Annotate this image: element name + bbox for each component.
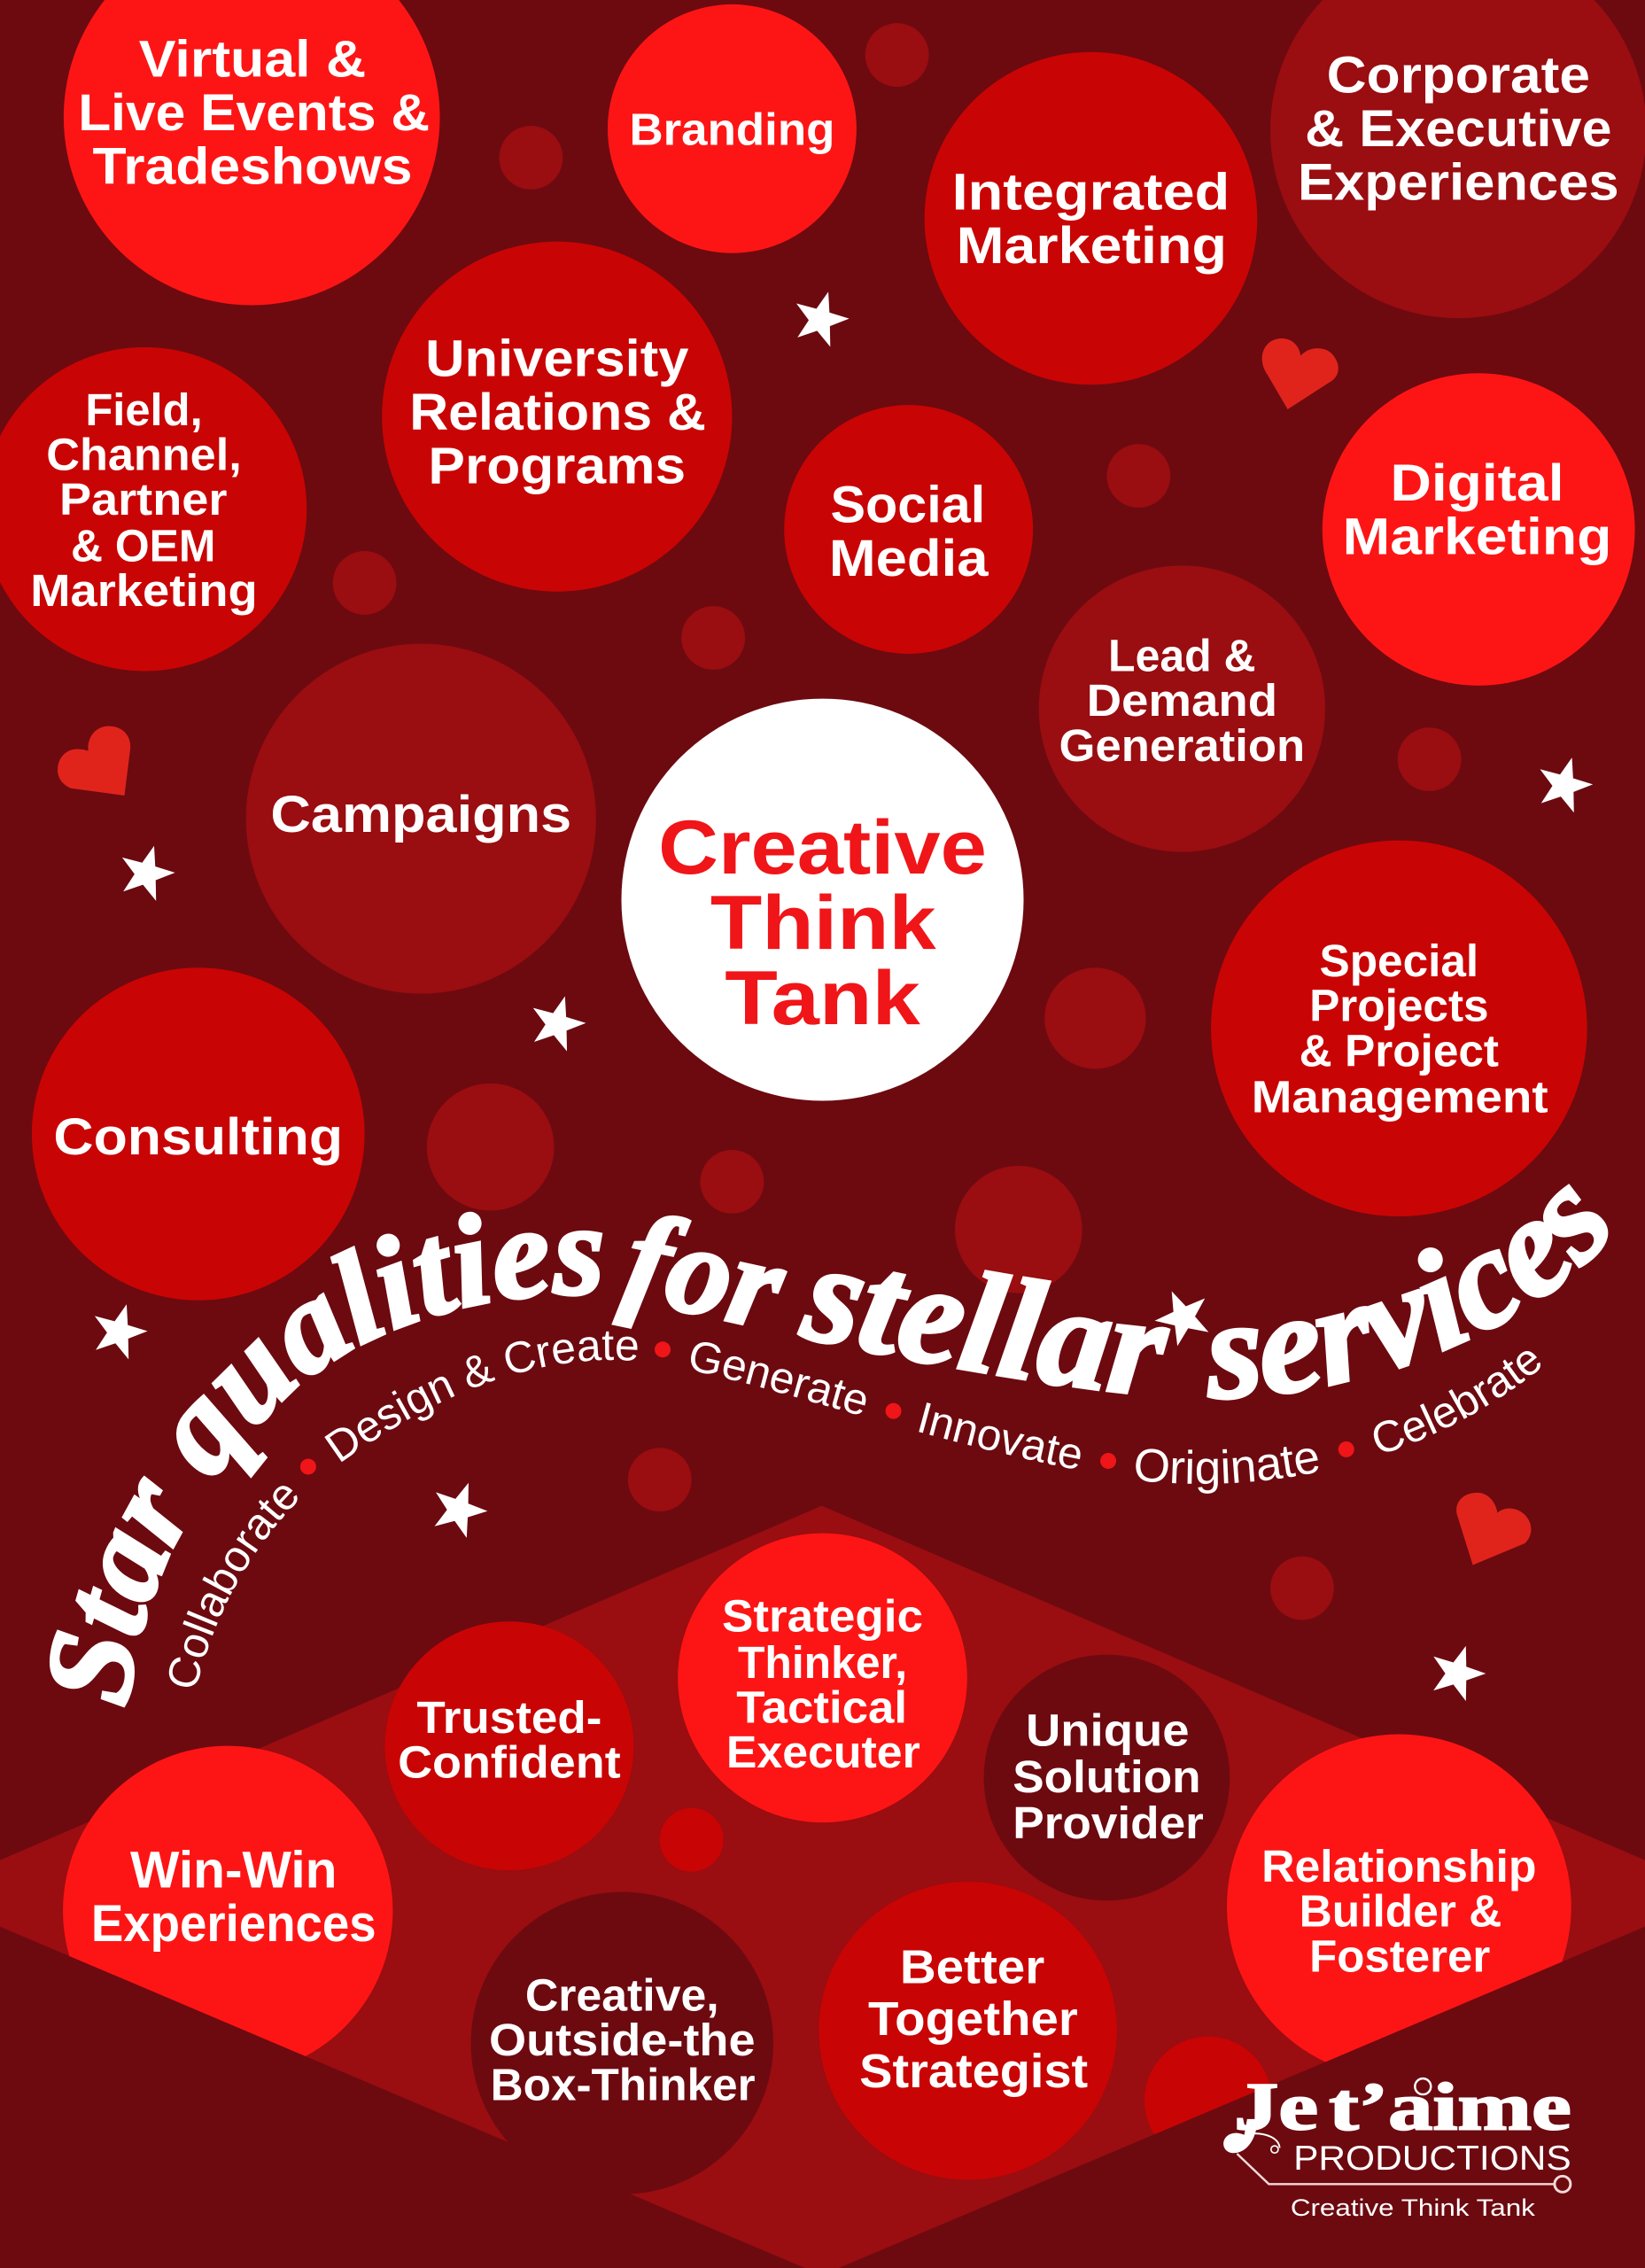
- circle: Virtual & Live Events & Tradeshows: [64, 0, 440, 305]
- circle: Corporate & Executive Experiences: Experiences: [1298, 153, 1619, 211]
- circle: Strategic Thinker, Tactical Executer: Strategic: [722, 1591, 923, 1642]
- circle: Consulting: Consulting: [53, 1108, 343, 1166]
- circle: Virtual & Live Events & Tradeshows: Tradeshows: [93, 137, 412, 195]
- circle: Lead & Demand Generation: Lead &: [1108, 631, 1256, 681]
- text: Win-Win Experiences: [91, 1842, 376, 1953]
- circle: Special Projects & Project Management: [1211, 841, 1587, 1216]
- circle: Better Together Strategist: [819, 1882, 1117, 2179]
- circle: Social Media: Media: [829, 530, 989, 587]
- circle: Special Projects & Project Management: & Project: [1300, 1025, 1499, 1076]
- dot: [660, 1808, 724, 1872]
- circle: Campaigns: Campaigns: [270, 786, 571, 843]
- circle: Corporate & Executive Experiences: Corporate: [1327, 46, 1590, 104]
- circle: Field, Channel, Partner & OEM Marketing: Channel,: [46, 430, 242, 480]
- circle: Strategic Thinker, Tactical Executer: [678, 1534, 967, 1822]
- text: Relationship Builder & Fosterer: Relationship: [1261, 1841, 1537, 1891]
- circle: Trusted-Confident: [384, 1621, 633, 1870]
- circle: Creative Think Tank: Tank: [725, 956, 921, 1041]
- circle: Unique Solution Provider: Solution: [1013, 1751, 1201, 1802]
- text: Relationship Builder & Fosterer: Fosterer: [1309, 1930, 1490, 1981]
- circle: Unique Solution Provider: [984, 1655, 1230, 1900]
- logo: Je t'aime Productions: Je t’aime: [1234, 2069, 1571, 2144]
- clipped circles: Win-Win, Relationship and dot: [63, 1735, 1571, 2163]
- circle: Better Together Strategist: Better: [900, 1940, 1044, 1993]
- circle: Integrated Marketing: Integrated: [952, 164, 1230, 221]
- circle: Trusted-Confident: Trusted-: [416, 1692, 601, 1743]
- circle: Special Projects & Project Management: Special: [1320, 936, 1478, 986]
- circle: University Relations & Programs: Relations &: [409, 384, 706, 441]
- circle: Creative Think Tank: Think: [710, 881, 937, 966]
- circle: Digital Marketing: [1323, 373, 1635, 686]
- circle: Branding: [608, 4, 857, 253]
- circle: Integrated Marketing: [925, 52, 1257, 384]
- circle: Creative, Outside-the Box-Thinker: Outside-the: [489, 2015, 756, 2065]
- hearts: [58, 338, 1531, 1565]
- circle: Social Media: [784, 405, 1033, 654]
- headline: Star qualities for stellar services: Star qualities for stellar services: [50, 1184, 1609, 1708]
- circle: Unique Solution Provider: Unique: [1026, 1705, 1190, 1756]
- circle: Unique Solution Provider: Provider: [1013, 1798, 1204, 1848]
- circle: Creative, Outside-the Box-Thinker: Creative,: [525, 1969, 719, 2020]
- circle: Lead & Demand Generation: [1039, 565, 1325, 852]
- circle: Field, Channel, Partner & OEM Marketing: & OEM: [71, 520, 215, 571]
- circle: Consulting: [32, 967, 365, 1301]
- circle: Special Projects & Project Management: Management: [1252, 1072, 1548, 1122]
- decorative dots: [333, 23, 1462, 1620]
- circle: University Relations & Programs: University: [425, 330, 689, 387]
- circle: Integrated Marketing: Marketing: [957, 217, 1227, 275]
- circle: Strategic Thinker, Tactical Executer: Thinker,: [738, 1637, 907, 1688]
- circle: Field, Channel, Partner & OEM Marketing: Field,: [85, 384, 203, 435]
- circle: Field, Channel, Partner & OEM Marketing: [0, 347, 306, 672]
- circle: University Relations & Programs: [382, 242, 732, 592]
- circle: Strategic Thinker, Tactical Executer: Tactical: [736, 1682, 907, 1732]
- circle: Strategic Thinker, Tactical Executer: Executer: [726, 1727, 920, 1777]
- circle: Virtual & Live Events & Tradeshows: Live Events &: [78, 84, 430, 142]
- circle: Campaigns: [246, 644, 596, 994]
- circle: Creative, Outside-the Box-Thinker: [471, 1892, 773, 2194]
- circle: Digital Marketing: Digital: [1391, 454, 1564, 512]
- text: Win-Win Experiences: Win-Win: [130, 1842, 338, 1899]
- text: Relationship Builder & Fosterer: Builder &: [1300, 1886, 1501, 1937]
- circle: Better Together Strategist: Strategist: [859, 2045, 1088, 2098]
- tagline: Collaborate, Design & Create, Generate, Innovate, Originate, Celebrate: Collaborate Design & Create Generate Innovate Originate Celebrate: [168, 1331, 1540, 1687]
- text: Relationship Builder & Fosterer: [1261, 1841, 1537, 1981]
- circle: Virtual & Live Events & Tradeshows: Virtual &: [139, 31, 366, 89]
- stars: [86, 284, 1598, 1705]
- circle: Lead & Demand Generation: Demand: [1087, 675, 1277, 726]
- logo: Je t'aime Productions: [1223, 2069, 1571, 2221]
- circle: Trusted-Confident: Confident: [398, 1737, 621, 1788]
- circle: Field, Channel, Partner & OEM Marketing: Marketing: [30, 565, 258, 616]
- circle: University Relations & Programs: Programs: [428, 437, 686, 494]
- circle: Creative Think Tank: Creative: [658, 805, 987, 890]
- circle: Special Projects & Project Management: Projects: [1309, 981, 1489, 1031]
- logo: Je t'aime Productions: PRODUCTIONS: [1293, 2140, 1571, 2178]
- circle: Branding: Branding: [629, 104, 834, 154]
- text: Win-Win Experiences: Experiences: [91, 1895, 376, 1953]
- circle: Better Together Strategist: Together: [868, 1992, 1078, 2046]
- circle: Corporate & Executive Experiences: & Executive: [1305, 100, 1611, 158]
- circle: Creative Think Tank: [621, 699, 1024, 1100]
- logo: Je t'aime Productions: Creative Think Tank: [1291, 2194, 1535, 2221]
- circle: Digital Marketing: Marketing: [1343, 508, 1611, 565]
- circle: Corporate & Executive Experiences: [1270, 0, 1645, 318]
- panel: diamond background: [0, 1506, 1645, 2268]
- circle: Lead & Demand Generation: Generation: [1059, 720, 1305, 771]
- circle: Field, Channel, Partner & OEM Marketing: Partner: [59, 474, 227, 524]
- star over headline: [1146, 1280, 1218, 1350]
- circle: Creative, Outside-the Box-Thinker: Box-Thinker: [491, 2060, 756, 2110]
- circle: Social Media: Social: [830, 476, 985, 533]
